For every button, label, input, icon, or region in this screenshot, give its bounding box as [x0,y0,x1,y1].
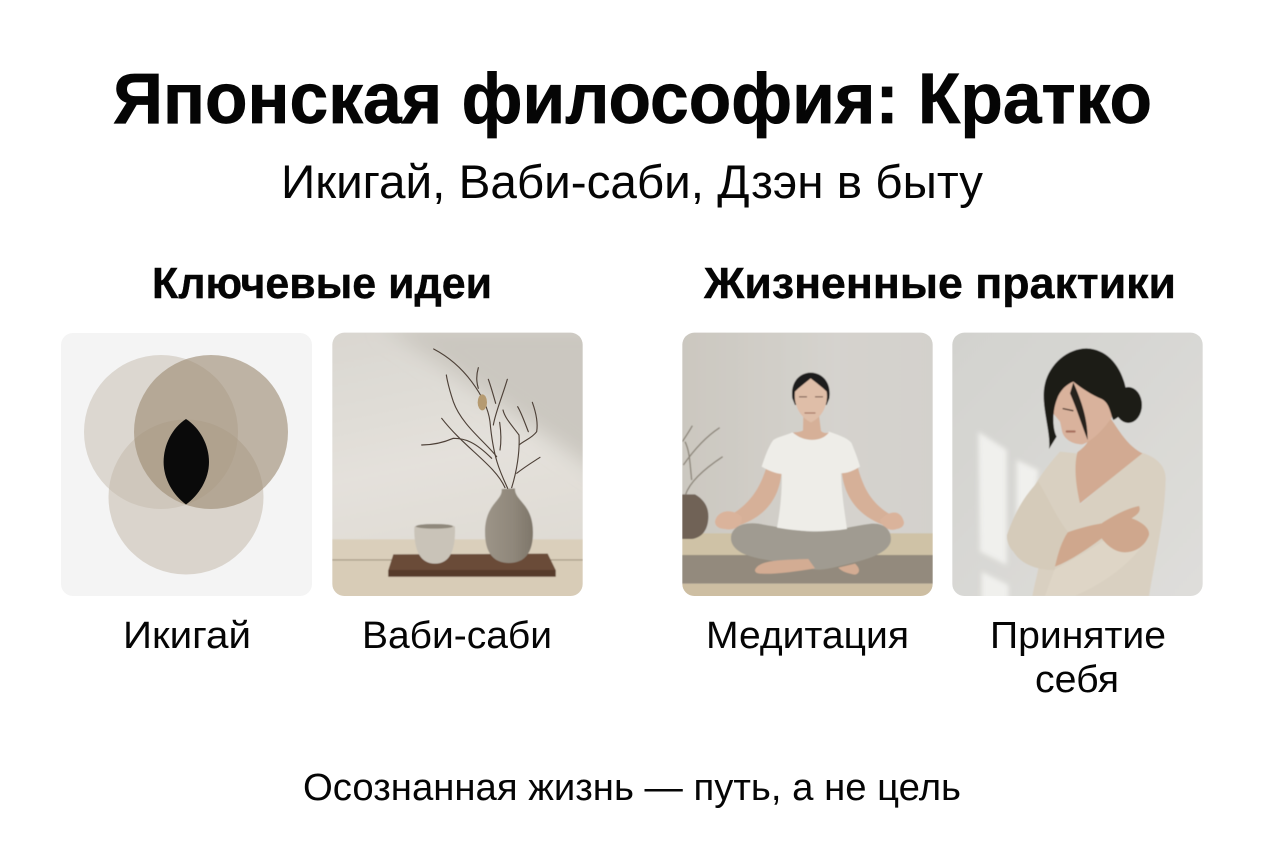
wooden tray [388,554,556,577]
wall shadow [402,332,583,466]
neck and chest [1076,415,1142,503]
label: wabi-sabi: Ваби-саби [362,615,552,657]
heading: key ideas: Ключевые идеи [152,259,492,308]
panel: wabi-sabi still life [332,332,583,596]
forearm and hand [1055,506,1149,567]
bare feet [755,559,815,574]
venn centre: black lens [164,419,209,504]
legs [731,523,891,570]
floor and mat [675,533,942,557]
hair [792,373,830,405]
t-shirt [762,432,860,531]
hair [1044,348,1127,449]
vase with branches [682,494,709,540]
face [795,378,827,422]
panel: ikigai venn diagram [61,333,312,596]
tatami floor [332,539,582,560]
dried blossom [478,394,487,410]
ceramic cup [414,524,455,564]
lower sleeve [1045,535,1148,596]
venn circle: bottom [108,420,264,574]
hair bun [1115,387,1142,423]
heading: life practices: Жизненные практики [703,259,1176,308]
subtitle: Икигай, Ваби-саби, Дзэн в быту [281,155,983,208]
hands [715,511,742,529]
venn circle: right [134,355,288,509]
left sleeve [1006,486,1040,568]
label: self-acceptance: себя [1035,659,1119,701]
footer tagline: Осознанная жизнь — путь, а не цель [303,767,961,809]
window light patches [978,432,1038,602]
lips [1066,430,1076,433]
label: ikigai: Икигай [123,615,251,657]
closed eye [1062,408,1074,411]
title: Японская философия: Кратко [113,60,1152,139]
label: meditation: Медитация [706,615,909,657]
venn circle: left [84,355,238,509]
sweater body [1032,452,1166,596]
panel: self-acceptance photo [952,332,1203,596]
label: self-acceptance: Принятие [990,615,1166,657]
ceramic vase [485,488,533,563]
face side strand [1070,382,1088,440]
neck [793,415,829,440]
dry branches [422,349,540,488]
face [1053,381,1113,445]
panel: meditation photo [682,332,933,596]
meditating woman: arms [735,469,782,525]
